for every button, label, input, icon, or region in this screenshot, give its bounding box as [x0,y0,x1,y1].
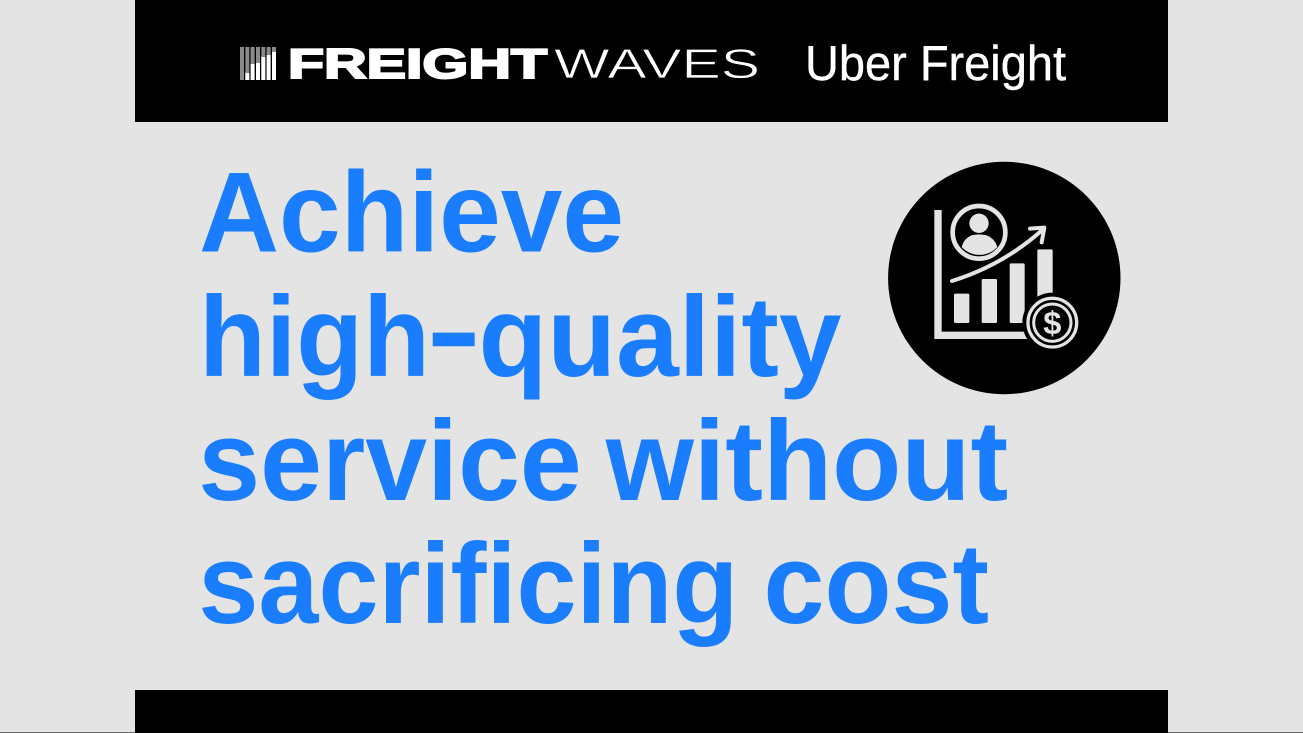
chart bars [954,249,1053,323]
title: cost [764,521,989,648]
title: quality [478,274,842,401]
dollar coin [1022,293,1082,353]
logo text: WAVES: WAVES [554,40,760,87]
title: service [198,398,582,525]
person badge [953,206,1005,259]
dollar coin: $ [1043,304,1061,341]
title: without [605,398,1008,525]
footer bar [135,690,1168,733]
title: - [426,267,481,394]
logo text: FREIGHT: FREIGHT [288,40,547,87]
title: Achieve [199,150,624,276]
title [198,150,1008,648]
icon: FreightWaves bars logo [240,47,276,80]
rising arrow [952,228,1044,281]
header bar with logos [135,0,1168,122]
title: sacrificing [198,521,738,648]
chart axes [934,210,1028,339]
title: high [199,274,430,401]
icon: chart with person and dollar coin in black circle [888,162,1120,394]
logo text: Uber Freight: Uber Freight [805,37,1066,91]
